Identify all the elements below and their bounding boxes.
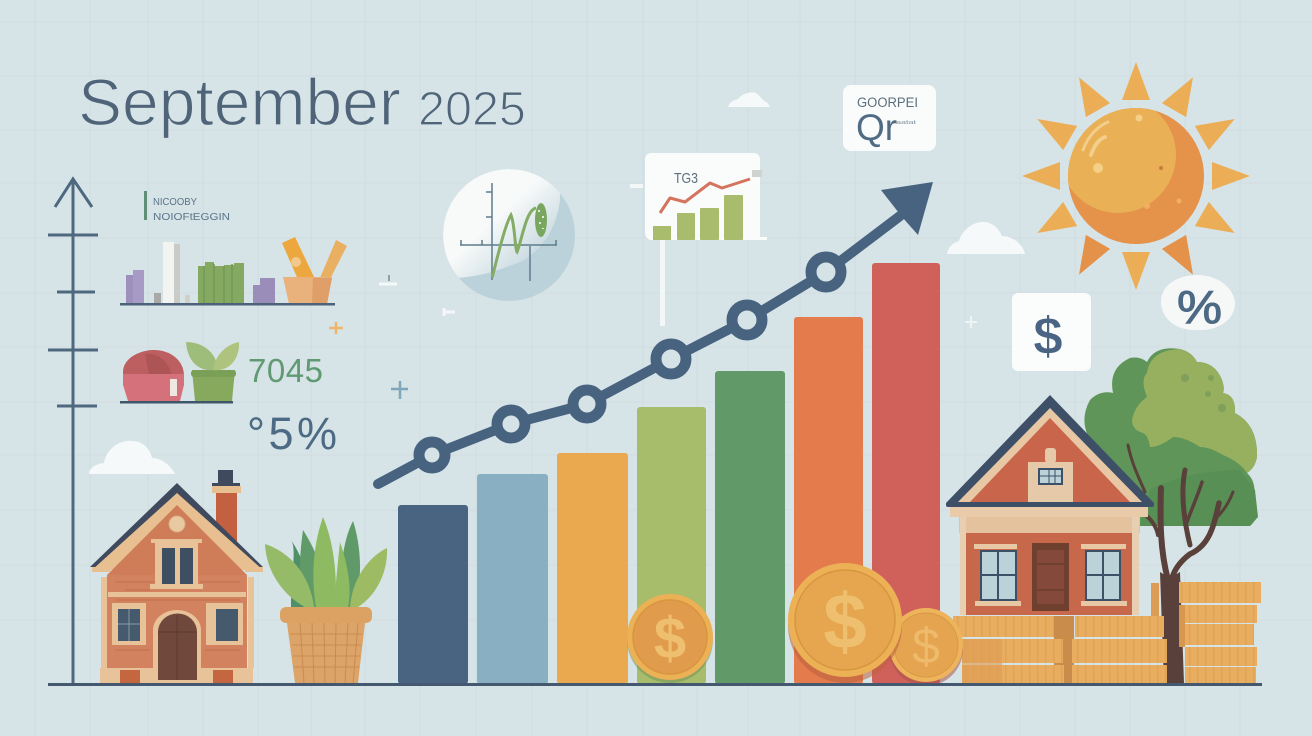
legend note <box>144 191 230 223</box>
cloud right <box>947 222 1025 254</box>
gold coins: $ <box>912 618 940 674</box>
top right callout card <box>843 85 936 151</box>
percent bubble <box>1161 275 1235 333</box>
billboard chart <box>630 153 767 326</box>
vertical axis with arrow <box>48 179 98 684</box>
infographic scene <box>48 62 1262 686</box>
top right callout card: Qr <box>856 107 897 148</box>
coin stacks under house <box>953 616 1167 683</box>
dollar card <box>1012 293 1091 371</box>
house left <box>90 470 263 683</box>
billboard chart: TG3 <box>674 170 698 187</box>
shelf two with basket and plant <box>120 342 239 404</box>
shelf one with small bars and basket <box>120 237 347 306</box>
gold coins <box>627 563 963 686</box>
potted plant <box>265 517 387 683</box>
percent bubble: % <box>1177 281 1222 333</box>
coin stack behind tree <box>1151 582 1261 683</box>
house right <box>946 395 1154 615</box>
tree <box>1084 348 1258 683</box>
cloud top <box>728 92 770 107</box>
title: 2025 <box>418 82 526 136</box>
legend note: NICOOBY <box>153 196 197 208</box>
top right callout card: aatat <box>896 120 917 126</box>
rising trend arrow <box>378 182 933 484</box>
title: September <box>78 65 401 139</box>
gold coins: $ <box>823 577 867 665</box>
cloud left <box>89 441 175 474</box>
legend note: NOIOFtEGGIN <box>153 211 230 223</box>
top right callout card: GOORPEI <box>857 95 918 110</box>
value 95 percent: °5% <box>247 408 337 459</box>
dollar card: $ <box>1033 307 1063 366</box>
baseline <box>48 683 1262 686</box>
gold coins: $ <box>654 606 686 671</box>
small globe chart <box>443 169 575 301</box>
sun <box>1022 62 1250 290</box>
bar chart <box>398 263 940 684</box>
value 7045: 7045 <box>248 352 323 389</box>
plus signs and sparkles <box>329 275 977 399</box>
